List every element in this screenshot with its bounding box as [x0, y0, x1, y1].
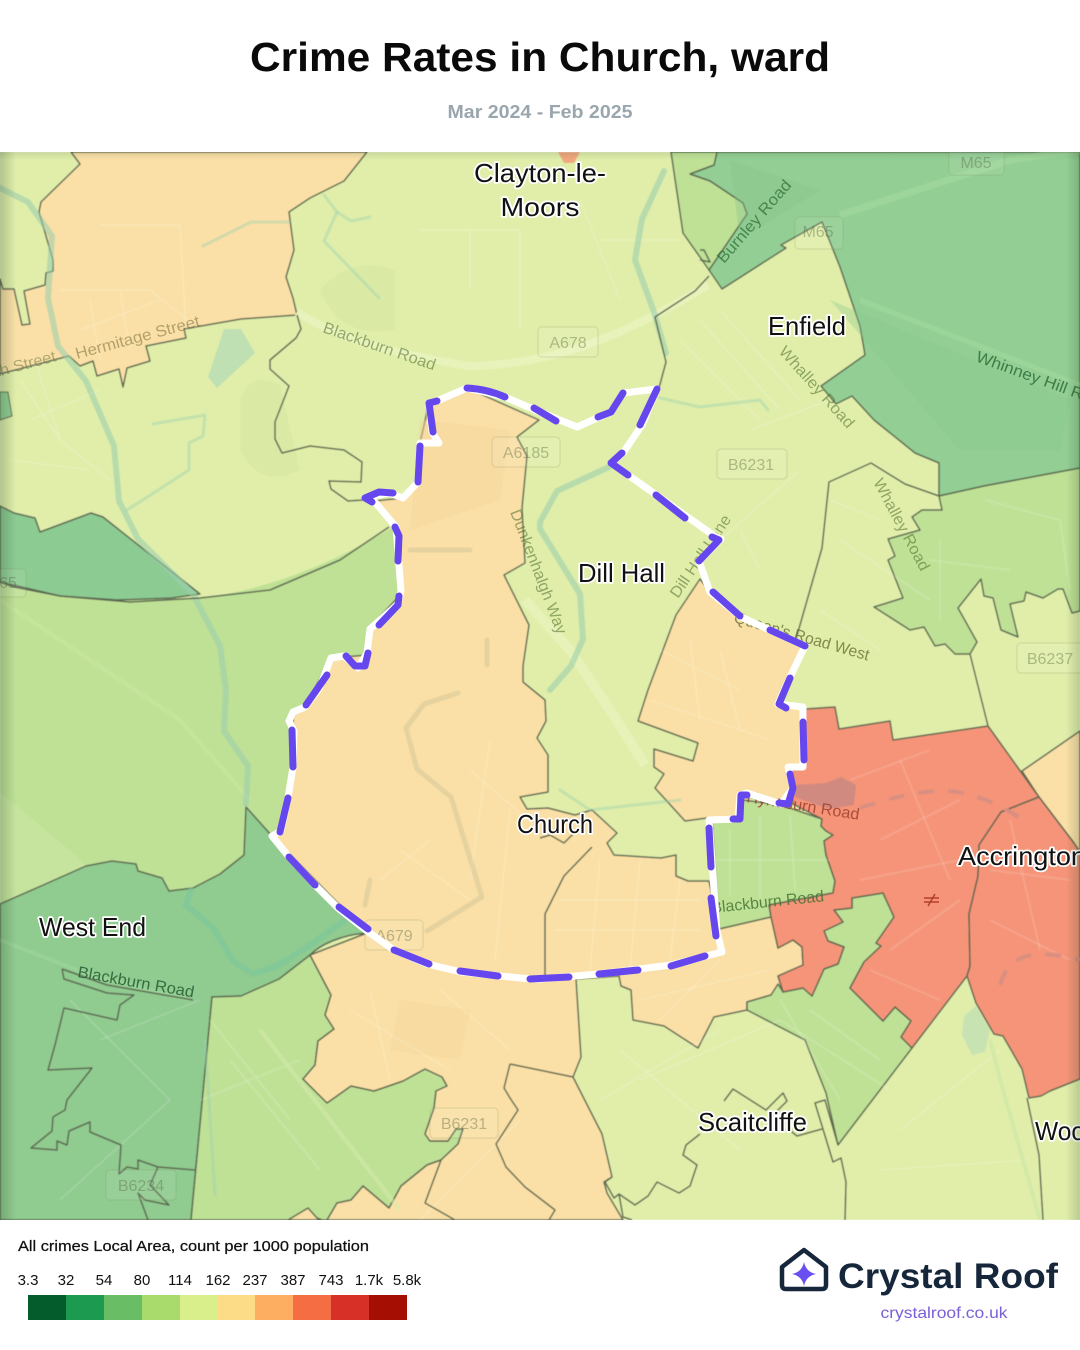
- road name labels: Dill Hall Lane: [667, 512, 735, 601]
- road name labels: Queen's Road West: [732, 610, 872, 665]
- area: Accrington red east: [967, 797, 1080, 1098]
- legend tick values: 162: [205, 1272, 231, 1289]
- rivers and streams: [0, 171, 768, 1195]
- place labels: Moors: [500, 192, 580, 222]
- legend: [18, 1238, 422, 1320]
- road number shields: B6231: [728, 457, 774, 474]
- legend tick values: 387: [280, 1272, 306, 1289]
- area: tan north-east of Accrington: [1022, 731, 1080, 852]
- legend tick values: 5.8k: [393, 1272, 422, 1289]
- place labels: Scaitcliffe: [698, 1107, 807, 1137]
- road number shields: B6231: [441, 1116, 487, 1133]
- map: crime rate choropleth: [0, 148, 1080, 1220]
- place labels: West End: [39, 912, 146, 942]
- legend tick values: 32: [58, 1272, 74, 1289]
- area: Church ward central tan: [272, 388, 803, 1220]
- legend colour scale: [28, 1295, 407, 1320]
- area: mid green Scaitcliffe wedge: [747, 893, 912, 1145]
- icon: house with star: [782, 1250, 826, 1289]
- major roads: [0, 150, 1080, 1220]
- legend title: All crimes Local Area, count per 1000 population: [18, 1238, 369, 1255]
- map edge vignette: [0, 152, 1080, 1220]
- place labels: Clayton-le-: [474, 158, 606, 188]
- road name labels: Whalley Road: [869, 476, 932, 574]
- area: Queens Road tan: [638, 579, 805, 821]
- place labels: Enfield: [768, 311, 846, 341]
- area: small tan bottom: [288, 1208, 322, 1220]
- area: Burnley Road mid green: [671, 152, 747, 270]
- place labels: Dill Hall: [578, 558, 665, 588]
- legend tick values: 80: [134, 1272, 150, 1289]
- place labels: Church: [517, 809, 593, 839]
- area: small green west edge: [0, 392, 12, 420]
- road number shields: [0, 148, 1080, 1200]
- place labels: [39, 158, 1080, 1146]
- road name labels: Blackburn Road: [711, 888, 825, 917]
- road name labels: Blackburn Road: [76, 964, 195, 1001]
- boundary lines: [0, 250, 1043, 1220]
- road name labels: Whalley Road: [775, 343, 857, 432]
- area: mid green west: [0, 525, 399, 904]
- map base: light green areas: [0, 152, 1080, 1220]
- place labels: Accrington: [958, 841, 1080, 871]
- road name labels: Hermitage Street: [74, 313, 202, 363]
- road number shields: M65: [960, 155, 992, 172]
- legend tick values: [18, 1272, 422, 1289]
- area: West End dark green: [0, 807, 367, 1220]
- logo url: crystalroof.co.uk: [880, 1305, 1009, 1322]
- road name labels: Blackburn Road: [321, 320, 438, 374]
- railway dashes in Accrington: [860, 789, 1020, 818]
- road number shields: B6234: [118, 1178, 164, 1195]
- road number shields: A6185: [503, 445, 549, 462]
- ward boundary: purple dashes: [280, 388, 805, 979]
- logo: Crystal Roof: [782, 1250, 1058, 1322]
- subtitle: date range: Mar 2024 - Feb 2025: [448, 102, 632, 122]
- ward boundary: white underlay: [272, 388, 805, 979]
- legend tick values: 743: [318, 1272, 344, 1289]
- icon: railway station: [924, 894, 939, 906]
- logo wordmark: Crystal Roof: [838, 1257, 1058, 1296]
- streets texture: [10, 200, 1070, 1220]
- area: hospital building highlight: [793, 777, 856, 809]
- area: Accrington red west: [769, 707, 1039, 1048]
- area: Whalley Road mid green east: [874, 468, 1080, 654]
- area: dark green west wedge: [0, 506, 200, 600]
- area: small orange top: [558, 152, 580, 163]
- land-use shading patches: [418, 197, 862, 440]
- legend tick values: 114: [168, 1272, 192, 1289]
- road number shields: A679: [375, 928, 413, 945]
- legend tick values: 1.7k: [355, 1272, 384, 1289]
- road name labels: Burnley Road: [714, 177, 795, 267]
- area: mid green Blackburn Road: [712, 800, 835, 929]
- legend tick values: 3.3: [18, 1272, 38, 1289]
- road name labels: Hyndburn Road: [745, 789, 861, 824]
- area: lighter patch south-west: [0, 792, 86, 904]
- road name labels: [0, 177, 1080, 1001]
- legend tick values: 54: [96, 1272, 112, 1289]
- ponds: [208, 329, 255, 388]
- area: north-west tan: [0, 152, 367, 387]
- road number shields: B6237: [1027, 651, 1073, 668]
- area: north-east dark green: [690, 152, 1080, 496]
- title: Crime Rates in Church, ward: [250, 34, 830, 80]
- area: mid green south: [191, 955, 463, 1220]
- road number shields: M65: [802, 224, 834, 241]
- legend tick values: 237: [242, 1272, 268, 1289]
- road number shields: A678: [549, 335, 587, 352]
- road name labels: Dunkenhalgh Way: [506, 507, 569, 637]
